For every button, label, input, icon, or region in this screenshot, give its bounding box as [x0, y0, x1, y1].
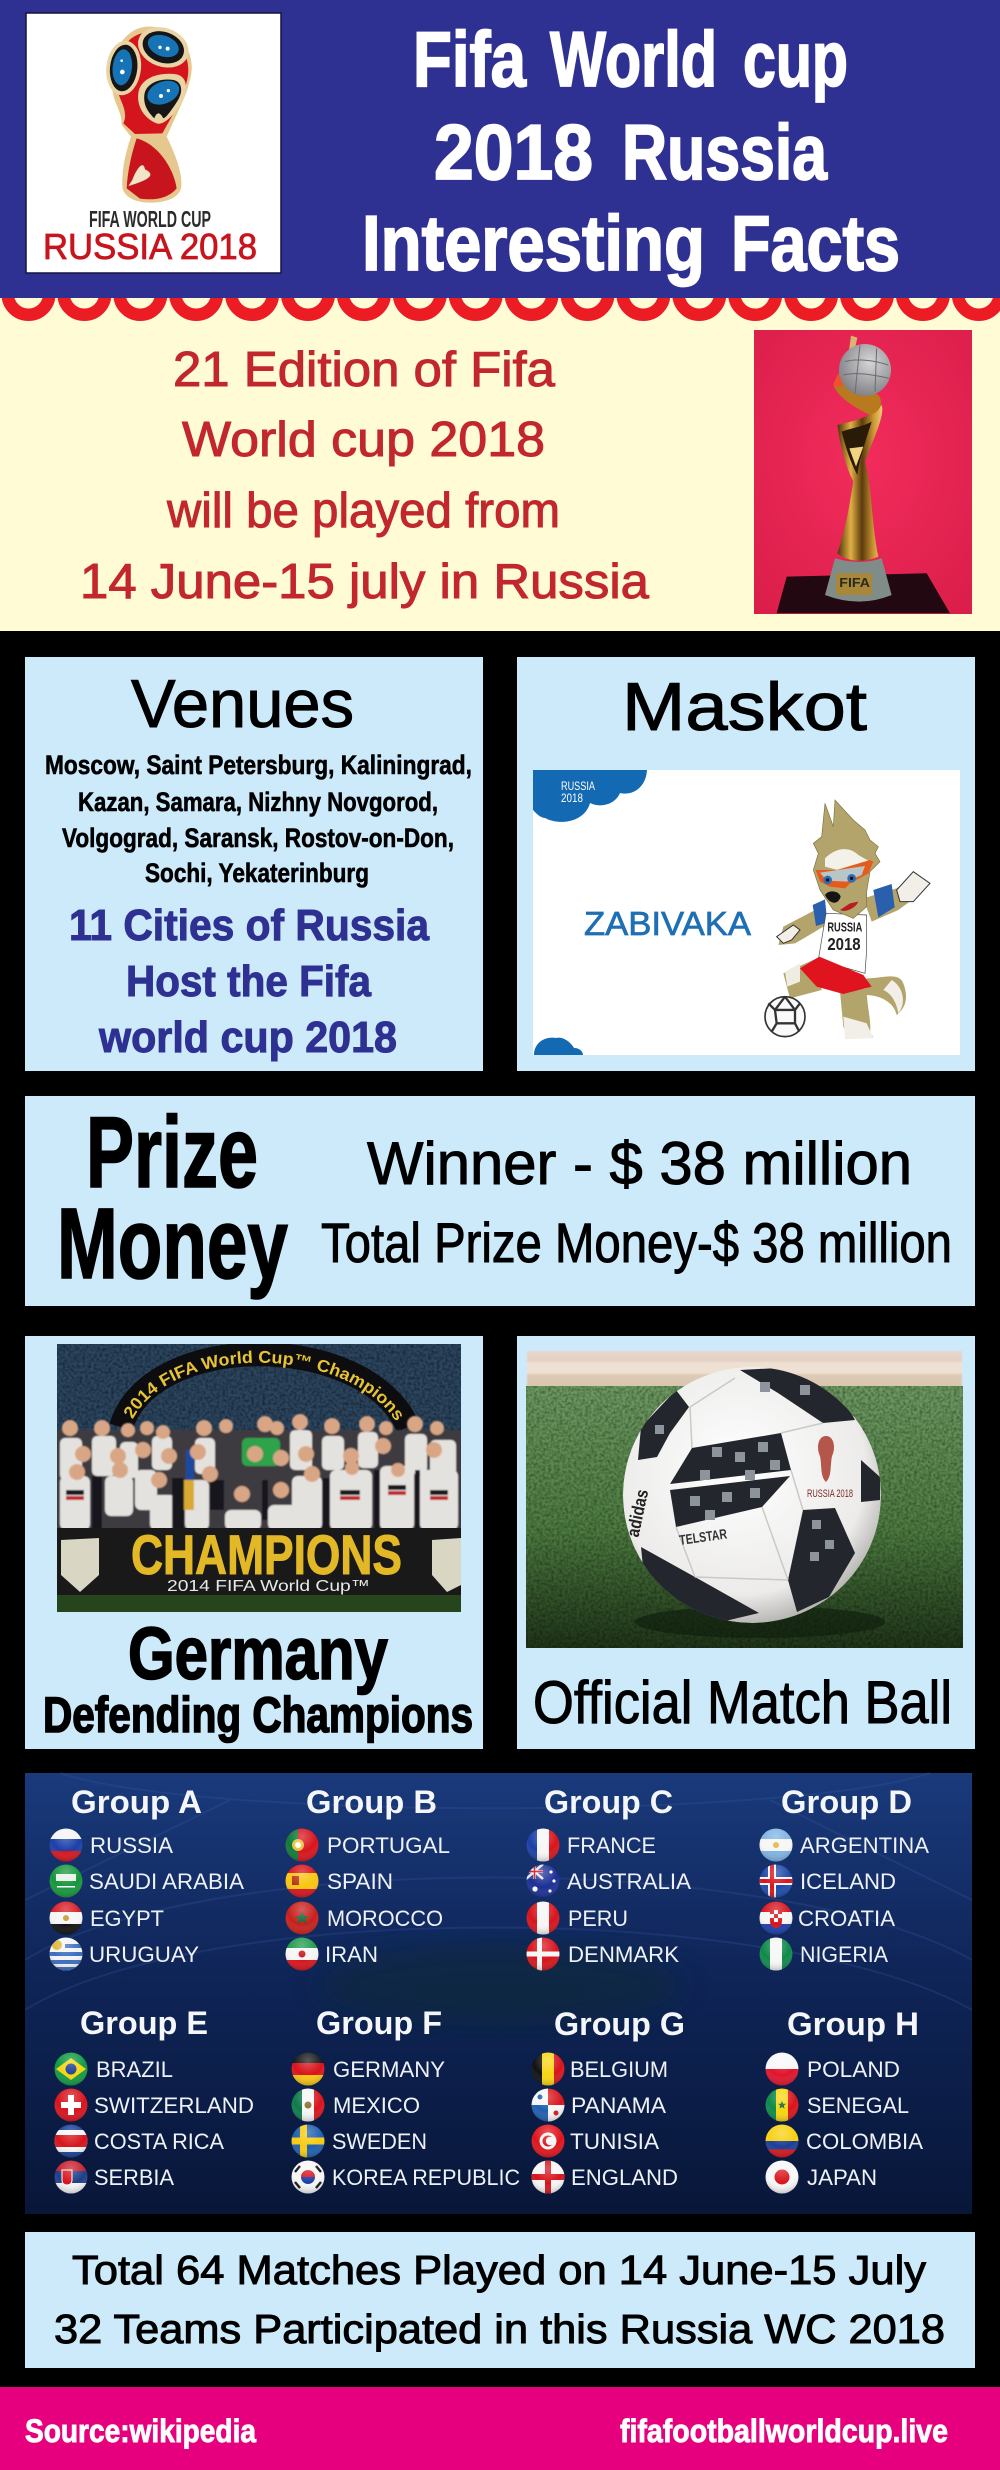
icon: Zabivaka wolf mascot: 2018 — [827, 934, 861, 954]
team: Senegal — [765, 2088, 909, 2122]
team: Mexico — [291, 2088, 420, 2122]
group E: Group E — [80, 2005, 208, 2041]
group H — [765, 2006, 923, 2194]
team: Russia: RUSSIA — [90, 1833, 173, 1858]
team: Korea Republic — [291, 2160, 520, 2194]
team: Panama — [531, 2088, 666, 2122]
website: fifafootballworldcup.live — [620, 2413, 948, 2449]
team: Argentina — [759, 1828, 929, 1862]
venues heading: Venues — [131, 666, 354, 742]
mascot heading: Maskot — [622, 669, 867, 745]
title: cup — [743, 15, 848, 103]
host city list — [45, 750, 472, 888]
panel: tournament totals: 32 Teams Participated in this Russia WC 2018 — [54, 2306, 945, 2352]
host cities statement — [69, 901, 429, 1062]
team: Mexico: MEXICO — [333, 2093, 420, 2118]
team: Japan: JAPAN — [807, 2165, 877, 2190]
photo: Germany team celebrating: CHAMPIONS — [131, 1523, 402, 1586]
team: Croatia: CROATIA — [798, 1906, 895, 1931]
host city list: Volgograd, Saransk, Rostov-on-Don, — [62, 823, 454, 853]
photo: Germany team celebrating: 2014 FIFA World Cup™ Champions — [124, 1350, 402, 1420]
team: Iran: IRAN — [325, 1942, 378, 1967]
footer band — [0, 2387, 1000, 2470]
team: England: ENGLAND — [571, 2165, 678, 2190]
team: Spain: SPAIN — [327, 1869, 393, 1894]
logo: Russia 2018 emblem: RUSSIA 2018 — [43, 226, 257, 267]
group H: Group H — [787, 2006, 919, 2042]
panel: prize money — [25, 1096, 975, 1306]
scalloped red trim — [8, 294, 1000, 315]
mascot picture — [533, 770, 960, 1055]
host cities statement: world cup 2018 — [98, 1013, 397, 1062]
team: Denmark: DENMARK — [568, 1942, 679, 1967]
team: Portugal: PORTUGAL — [327, 1833, 450, 1858]
champions caption: Defending Champions — [43, 1687, 473, 1743]
mascot picture: ZABIVAKA — [584, 905, 751, 942]
team: Serbia: SERBIA — [94, 2165, 174, 2190]
group C — [526, 1784, 691, 1971]
group D — [759, 1784, 929, 1971]
team: Belgium — [531, 2052, 668, 2086]
group A — [49, 1784, 244, 1971]
team: Morocco: MOROCCO — [327, 1906, 443, 1931]
group G — [531, 2006, 685, 2194]
intro text: World cup 2018 — [182, 413, 545, 467]
team: Costa Rica — [54, 2124, 224, 2158]
photo: Telstar 18 ball on grass — [526, 1351, 963, 1648]
photo: Germany team celebrating — [57, 1344, 461, 1612]
header band — [0, 0, 1000, 298]
team: Portugal — [285, 1828, 450, 1862]
team: Australia — [526, 1864, 691, 1898]
team: Brazil — [54, 2052, 173, 2086]
team: Switzerland: SWITZERLAND — [94, 2093, 254, 2118]
prize amounts: Winner - $ 38 million — [367, 1130, 912, 1197]
team: France — [526, 1828, 656, 1862]
panel: group draw — [25, 1773, 972, 2214]
host city list: Moscow, Saint Petersburg, Kaliningrad, — [45, 750, 472, 780]
photo: Telstar 18 ball on grass: TELSTAR — [678, 1525, 728, 1548]
title — [362, 15, 900, 287]
panel: defending champions — [25, 1336, 483, 1749]
team: Croatia — [759, 1901, 895, 1936]
host cities statement: Host the Fifa — [126, 957, 371, 1006]
team: Iceland: ICELAND — [800, 1869, 896, 1894]
group C: Group C — [544, 1784, 673, 1820]
team: Uruguay: URUGUAY — [89, 1942, 199, 1967]
team: Germany — [291, 2052, 445, 2087]
intro text: will be played from — [166, 484, 560, 538]
group B: Group B — [306, 1784, 437, 1820]
team: Colombia — [765, 2124, 923, 2158]
icon: Zabivaka wolf mascot — [765, 800, 930, 1039]
champions caption — [43, 1612, 473, 1743]
photo: Telstar 18 ball on grass: adidas — [623, 1488, 652, 1539]
team: Saudi Arabia — [49, 1864, 244, 1898]
team: France: FRANCE — [567, 1833, 656, 1858]
logo wordmark: FIFA WORLD CUP — [89, 206, 211, 232]
prize money heading: Money — [57, 1188, 288, 1300]
host city list: Kazan, Samara, Nizhny Novgorod, — [78, 787, 438, 817]
team: Egypt — [49, 1901, 164, 1936]
group F — [291, 2005, 520, 2194]
intro text: 14 June-15 july in Russia — [80, 555, 650, 609]
team: Korea Republic: KOREA REPUBLIC — [332, 2165, 520, 2190]
logo: Russia 2018 emblem — [26, 13, 281, 273]
prize money heading: Prize — [86, 1097, 258, 1209]
group E — [54, 2005, 254, 2195]
team: Poland: POLAND — [807, 2057, 900, 2082]
team: Nigeria: NIGERIA — [800, 1942, 888, 1967]
intro text — [80, 343, 650, 609]
panel: tournament totals — [25, 2232, 975, 2368]
ball caption: Official Match Ball — [533, 1669, 952, 1736]
photo: Telstar 18 ball on grass: RUSSIA 2018 — [807, 1488, 853, 1500]
trophy photo — [754, 330, 972, 614]
title: Interesting — [362, 199, 705, 287]
champions caption: Germany — [128, 1612, 388, 1695]
team: Australia: AUSTRALIA — [567, 1869, 691, 1894]
group F: Group F — [316, 2005, 442, 2041]
team: Denmark — [526, 1937, 679, 1971]
team: Tunisia: TUNISIA — [570, 2129, 659, 2154]
prize money heading — [57, 1097, 288, 1300]
title: Facts — [731, 199, 900, 287]
group G: Group G — [554, 2006, 685, 2042]
mascot picture: RUSSIA — [561, 779, 595, 793]
team: Serbia — [54, 2160, 174, 2195]
team: Switzerland — [54, 2088, 254, 2122]
prize amounts — [321, 1130, 952, 1274]
host city list: Sochi, Yekaterinburg — [145, 858, 369, 888]
title: 2018 — [434, 108, 593, 196]
team: England — [531, 2160, 678, 2194]
team: Uruguay — [49, 1937, 199, 1971]
team: Sweden — [291, 2124, 427, 2158]
team: Egypt: EGYPT — [90, 1906, 164, 1931]
title: Fifa — [413, 15, 527, 103]
team: Germany: GERMANY — [333, 2057, 445, 2082]
team: Iran — [285, 1937, 378, 1972]
team: Senegal: SENEGAL — [807, 2093, 909, 2118]
team: Brazil: BRAZIL — [96, 2057, 173, 2082]
intro panel — [0, 294, 1000, 631]
group B — [285, 1784, 450, 1972]
photo: Germany team celebrating: 2014 FIFA World Cup™ — [167, 1578, 370, 1595]
team: Peru: PERU — [568, 1906, 628, 1931]
panel: tournament totals: Total 64 Matches Played on 14 June-15 July — [72, 2247, 927, 2293]
team: Tunisia — [531, 2124, 659, 2158]
group D: Group D — [781, 1784, 912, 1820]
host cities statement: 11 Cities of Russia — [69, 901, 429, 950]
team: Japan — [765, 2160, 877, 2194]
mascot picture: 2018 — [561, 791, 583, 805]
team: Peru — [526, 1901, 628, 1935]
panel: mascot — [517, 657, 975, 1071]
panel: venues — [25, 657, 483, 1071]
trophy photo: FIFA — [839, 575, 870, 590]
team: Panama: PANAMA — [571, 2093, 666, 2118]
team: Belgium: BELGIUM — [570, 2057, 668, 2082]
team: Argentina: ARGENTINA — [800, 1833, 929, 1858]
title: World — [550, 15, 717, 103]
team: Russia — [49, 1828, 173, 1863]
title: Russia — [622, 108, 827, 196]
team: Iceland — [759, 1864, 896, 1898]
team: Saudi Arabia: SAUDI ARABIA — [89, 1869, 244, 1894]
team: Colombia: COLOMBIA — [806, 2129, 923, 2154]
team: Spain — [285, 1864, 393, 1898]
source credit: Source:wikipedia — [25, 2413, 256, 2449]
group A: Group A — [71, 1784, 202, 1820]
team: Sweden: SWEDEN — [332, 2129, 427, 2154]
team: Costa Rica: COSTA RICA — [94, 2129, 224, 2154]
intro text: 21 Edition of Fifa — [173, 343, 556, 397]
panel: official match ball — [517, 1336, 975, 1749]
icon: Zabivaka wolf mascot: RUSSIA — [827, 921, 862, 935]
team: Morocco — [285, 1901, 443, 1935]
team: Poland — [765, 2052, 900, 2086]
team: Nigeria — [759, 1937, 888, 1971]
